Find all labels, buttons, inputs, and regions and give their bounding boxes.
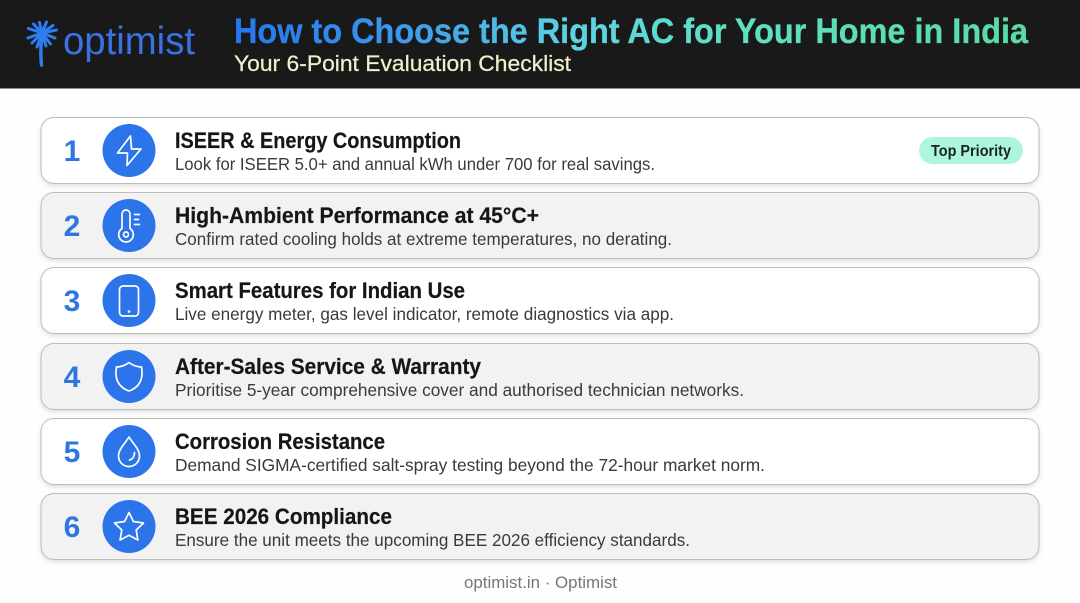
icon: palm tree [28,22,56,65]
number 6: 6 [64,511,80,544]
number 5: 5 [64,436,80,469]
number 3: 3 [64,285,80,318]
badge: top priority: Top Priority [931,143,1011,160]
icon: lightning bolt [102,124,156,177]
heading 4: After-Sales Service & Warranty [175,354,482,379]
heading 6: BEE 2026 Compliance [175,504,392,529]
panel: item 3 [41,268,1039,334]
title: How to Choose the Right AC for Your Home in India [234,12,1028,51]
logo [28,20,195,65]
icon: shield [102,350,156,403]
icon: thermometer [102,199,156,252]
description 1: Look for ISEER 5.0+ and annual kWh under 700 for real savings. [175,154,655,174]
description 6: Ensure the unit meets the upcoming BEE 2026 efficiency standards. [175,530,690,550]
description 2: Confirm rated cooling holds at extreme temperatures, no derating. [175,229,672,249]
footer: optimist.in · Optimist [464,573,617,592]
number 1: 1 [64,135,80,168]
description 5: Demand SIGMA-certified salt-spray testing beyond the 72-hour market norm. [175,455,765,475]
heading 5: Corrosion Resistance [175,429,385,454]
panel: item 2 [41,192,1039,258]
header band [0,0,1080,89]
panel: item 5 [41,418,1039,484]
description 3: Live energy meter, gas level indicator, remote diagnostics via app. [175,304,674,324]
icon: star [102,500,156,553]
number 2: 2 [64,210,80,243]
heading 2: High-Ambient Performance at 45°C+ [175,203,539,228]
logo wordmark: optimist [63,20,195,63]
icon: smartphone [102,274,156,327]
description 4: Prioritise 5-year comprehensive cover and authorised technician networks. [175,380,744,400]
subtitle: Your 6-Point Evaluation Checklist [234,51,571,76]
panel: item 4 [41,344,1039,410]
heading 1: ISEER & Energy Consumption [175,128,461,153]
panel: item 1 [41,118,1039,184]
badge: top priority [919,137,1023,164]
icon: water drop [102,425,156,478]
number 4: 4 [64,361,81,394]
panel: item 6 [41,494,1039,560]
heading 3: Smart Features for Indian Use [175,278,465,303]
